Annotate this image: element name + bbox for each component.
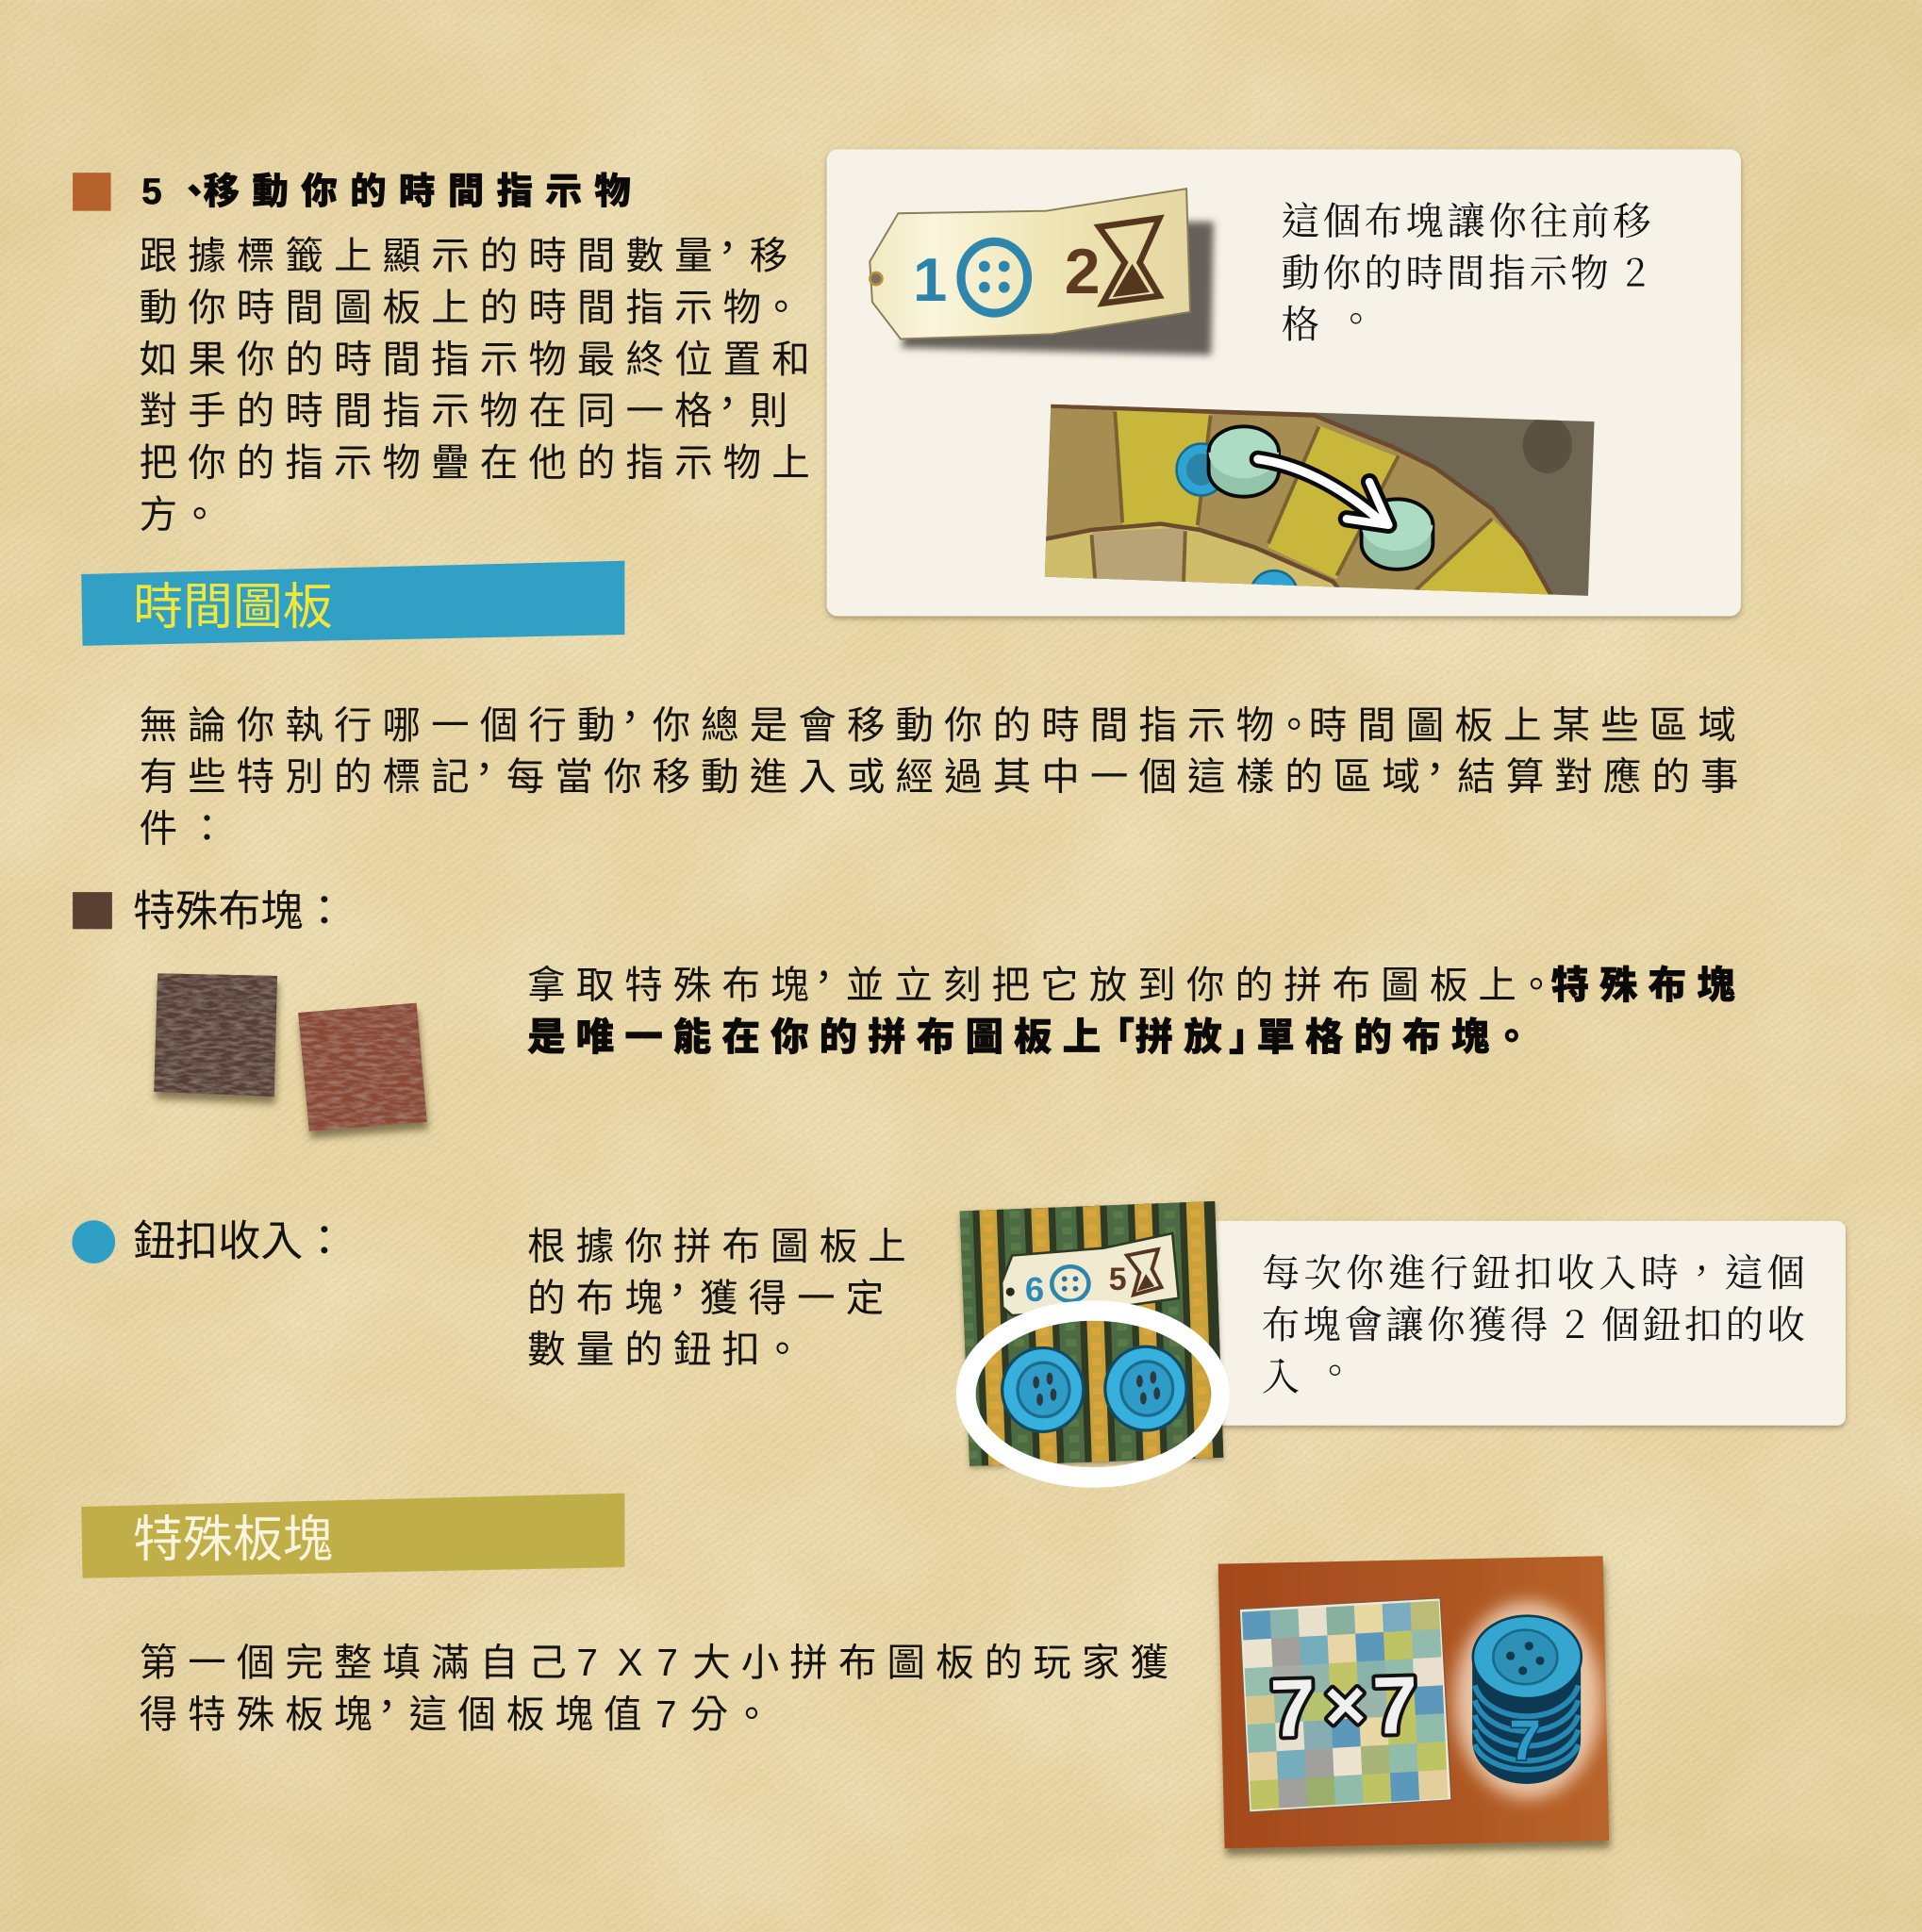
text block: tag explanation	[1282, 190, 1661, 349]
icon: special patch tiles	[154, 973, 427, 1131]
panel: time token example	[827, 149, 1741, 618]
icon: end time token	[1362, 499, 1433, 570]
icon: blue button right	[1105, 1346, 1186, 1430]
text block: step 5 description: 如果你的時間指示物最終位置和	[140, 328, 820, 384]
text block: tag explanation: 。	[1336, 289, 1384, 344]
text block: special patch rule: 並	[846, 953, 894, 1009]
text block: button income rule: 數量的鈕扣。	[527, 1318, 812, 1374]
text block: time board intro: 件：	[140, 798, 237, 853]
text block: time board intro: ，	[465, 738, 514, 794]
label: 7 x 7: ×	[1323, 1665, 1367, 1746]
text block: time board intro: 結	[1457, 746, 1506, 801]
text block: step 5 description: 方。	[140, 483, 229, 538]
illustration: 7x7 bonus tile	[1218, 1556, 1609, 1848]
text block: time board intro: 總是會移動你的時間指示物。時間圖板上某些區域	[701, 694, 1747, 750]
text block: special tile rule: 7	[576, 1641, 608, 1684]
text block: button income rule: ，	[658, 1259, 707, 1314]
text block: button income rule	[527, 1214, 917, 1374]
text block: callout explanation: 。	[1316, 1341, 1364, 1396]
text block: callout explanation: 布塊會讓你獲得 2 個鈕扣的收	[1262, 1294, 1814, 1349]
icon: blue button left	[1002, 1347, 1084, 1431]
text block: special patch rule: 立刻把它放到你的拼布圖板上。特殊布塊	[894, 953, 1746, 1009]
text block: step 5 description: ，	[708, 217, 757, 272]
text block: special tile rule: ，	[368, 1676, 416, 1731]
text block: tag explanation: 格	[1282, 293, 1330, 349]
text block: special patch rule: 是唯一能在你的拼布圖板上「拼放」單格的布塊。	[527, 1005, 1541, 1061]
text block: special tile rule: 。	[733, 1683, 781, 1739]
icon: stack of seven buttons: 7	[1509, 1709, 1541, 1772]
text block: special tile rule: 7	[655, 1693, 688, 1736]
text block: step 5 description: 則	[750, 380, 798, 436]
text block: special tile rule: 7	[656, 1641, 688, 1684]
text block: special tile rule	[140, 1631, 1179, 1739]
banner: special tile heading: 特殊板塊	[133, 1511, 333, 1567]
text block: button income rule: 根據你拼布圖板上	[527, 1214, 917, 1270]
icon: price tag with 1 button and 2 time	[870, 189, 1214, 355]
text block: time board intro: 有些特別的標記	[140, 746, 480, 801]
text block: tag explanation: 這個布塊讓你往前移	[1282, 190, 1661, 245]
text block: step 5 description: 跟據標籤上顯示的時間數量	[140, 224, 723, 280]
heading: step 5: 、	[176, 162, 225, 215]
text block: special patch rule: ，	[804, 947, 853, 1002]
icon: dark patch tile	[154, 973, 277, 1097]
icon: 7x7 quilt board	[1239, 1598, 1451, 1812]
illustration: striped patch with buttons	[949, 1195, 1232, 1488]
text block: step 5 description: 對手的時間指示物在同一格	[140, 380, 723, 436]
text block: tag explanation: 動你的時間指示物 2	[1282, 241, 1656, 297]
icon: stack of seven buttons	[1472, 1616, 1582, 1784]
icon: price tag with 1 button and 2 time: 1	[913, 245, 947, 314]
text block: step 5 description: 把你的指示物疊在他的指示物上	[140, 432, 820, 487]
text block: time board intro: 你	[653, 694, 701, 750]
text block: time board intro	[140, 686, 1749, 853]
text block: step 5 description: ，	[708, 372, 757, 428]
text block: time board intro: 算對應的事	[1506, 746, 1749, 801]
text block: special tile rule: X	[618, 1641, 654, 1684]
text block: button income rule: 得一定	[749, 1266, 894, 1322]
text block: time board intro: 每	[506, 746, 555, 801]
text block: step 5 description: 動你時間圖板上的時間指示物。	[140, 276, 810, 332]
text block: special tile rule: 得特殊板塊	[140, 1683, 383, 1739]
text block: special patch rule: 拿取特殊布塊	[527, 953, 820, 1009]
text block: time board intro: ，	[611, 686, 659, 742]
label: 7 x 7: 7	[1269, 1662, 1317, 1755]
text block: callout explanation: 入	[1262, 1346, 1310, 1401]
icon: start time token	[1209, 426, 1279, 497]
text block: time board intro: 無論你執行哪一個行動	[140, 694, 626, 750]
banner: time board heading: 時間圖板	[133, 579, 333, 635]
arrow: token movement	[1258, 459, 1388, 525]
text block: step 5 description: 移	[750, 224, 798, 280]
icon: small price tag: 5	[1109, 1262, 1127, 1297]
icon: red patch tile	[298, 1003, 427, 1131]
panel: button income callout	[1183, 1221, 1846, 1426]
heading: button income: 鈕扣收入：	[133, 1207, 345, 1268]
banner: special tile heading	[81, 1494, 624, 1578]
heading: special patches: 特殊布塊：	[133, 876, 345, 937]
section marker: orange square	[73, 173, 111, 211]
text block: button income rule: 的布塊	[527, 1266, 673, 1322]
text block: special tile rule: 大小拼布圖板的玩家獲	[692, 1631, 1179, 1687]
banner: time board heading	[81, 561, 624, 646]
text block: special patch rule	[527, 947, 1746, 1061]
section marker: brown square	[73, 892, 112, 929]
text block: time board intro: ，	[1416, 738, 1465, 794]
text block: special tile rule: 第一個完整填滿自己	[140, 1631, 577, 1687]
text block: callout explanation	[1262, 1242, 1814, 1401]
icon: small price tag	[1002, 1233, 1179, 1315]
label: 7 x 7: 7	[1371, 1660, 1419, 1752]
text block: special tile rule: 分	[690, 1683, 738, 1739]
text block: step 5 description	[140, 217, 820, 538]
text block: time board intro: 當你移動進入或經過其中一個這樣的區域	[555, 746, 1431, 801]
illustration: time board track with arrow	[1045, 404, 1594, 596]
icon: small price tag: 6	[1025, 1270, 1044, 1309]
text block: callout explanation: 每次你進行鈕扣收入時，這個	[1262, 1242, 1814, 1297]
highlight: white ring around buttons	[956, 1300, 1230, 1488]
heading: step 5: 移動你的時間指示物	[204, 162, 643, 215]
text block: button income rule: 獲	[700, 1266, 749, 1322]
section marker: blue circle	[72, 1220, 115, 1263]
heading: step 5: 5	[141, 172, 174, 212]
text block: special tile rule: 個板塊值	[457, 1683, 653, 1739]
text block: special tile rule: 這	[409, 1683, 457, 1739]
icon: blue buttons on track	[1175, 442, 1298, 586]
icon: price tag with 1 button and 2 time: 2	[1065, 237, 1101, 307]
